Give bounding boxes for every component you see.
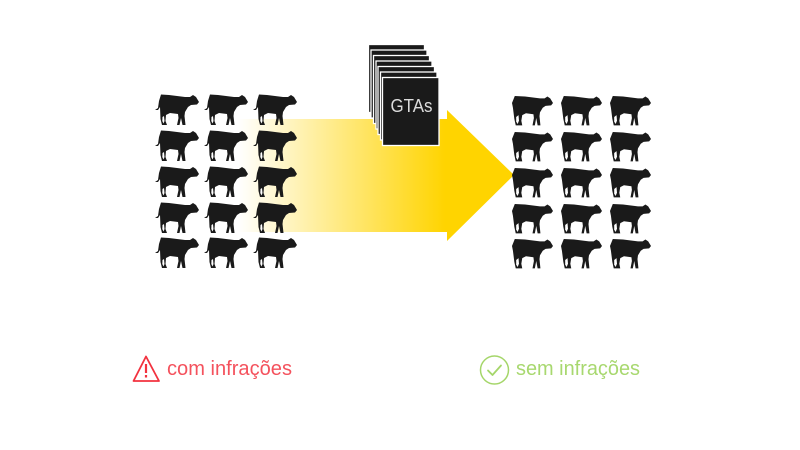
stack of GTA documents (368, 44, 439, 146)
icon: check circle (480, 356, 508, 384)
GTAs label: GTAs (390, 96, 432, 116)
icon: warning triangle (134, 356, 159, 381)
legend: sem infrações (480, 356, 640, 384)
left herd: cows with infractions (155, 94, 297, 268)
legend: com infrações (134, 356, 292, 381)
label: com infrações: com infrações (167, 358, 292, 380)
label: sem infrações: sem infrações (516, 358, 640, 380)
gradient arrow (238, 110, 514, 241)
right herd: cows without infractions (512, 96, 651, 268)
